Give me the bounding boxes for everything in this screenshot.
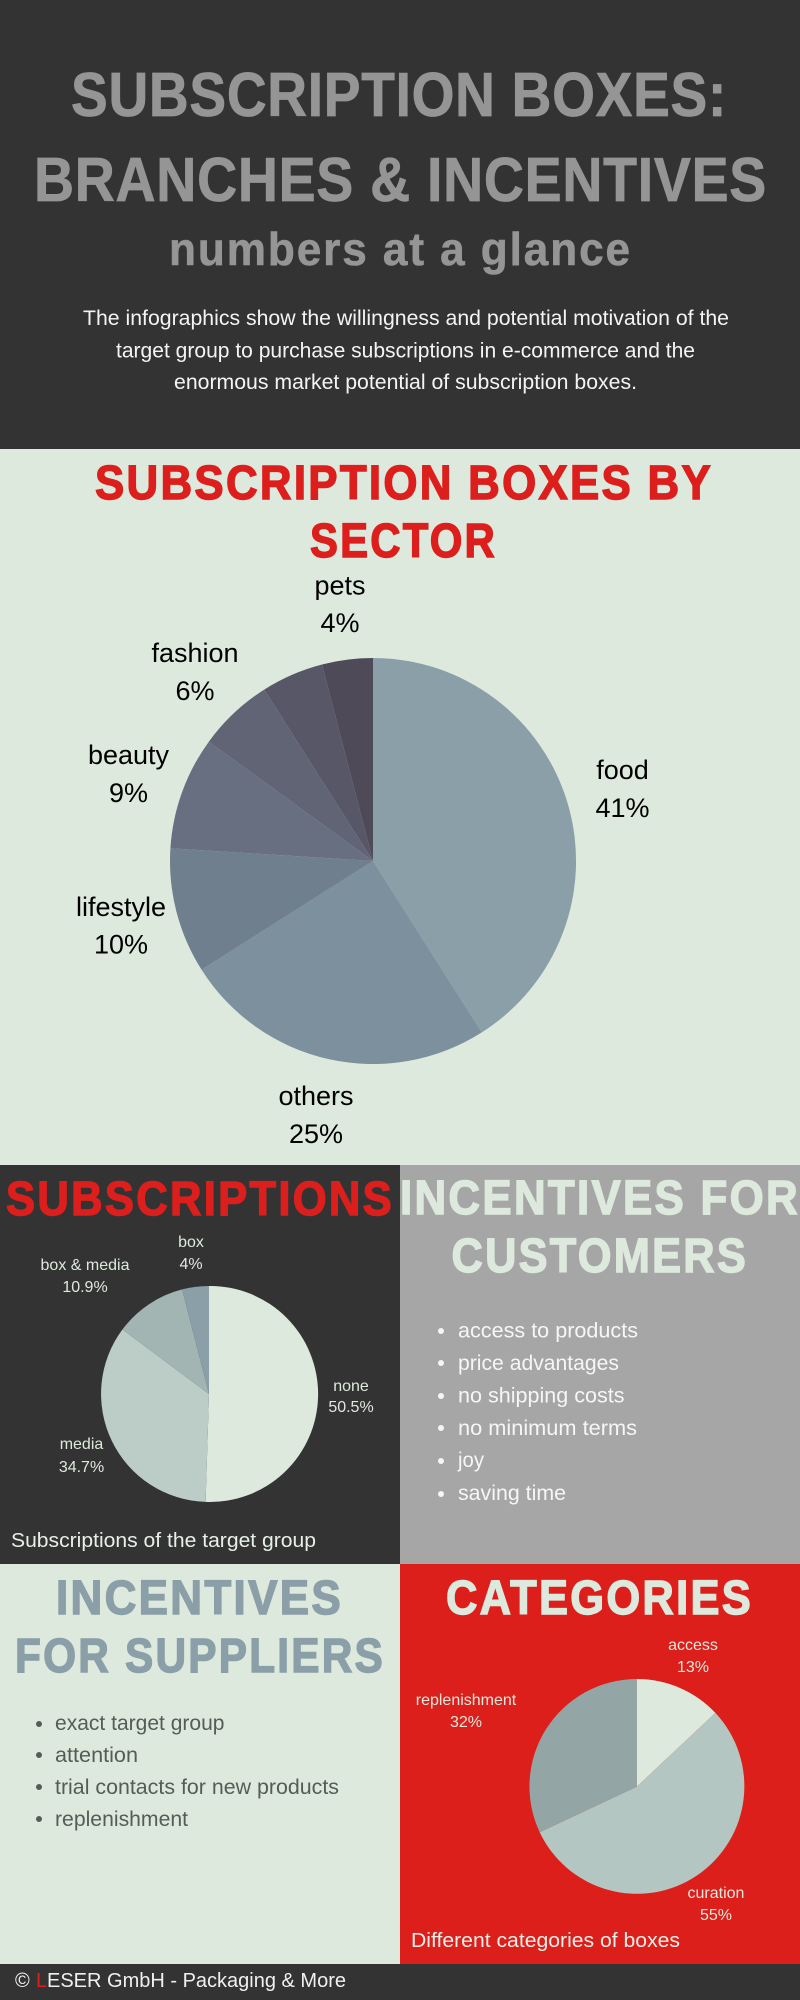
list: customer incentives (438, 1320, 638, 1505)
heading: incentives for suppliers: INCENTIVES (56, 1572, 343, 1625)
panel: categories (400, 1564, 800, 1964)
pie labels: subscriptions: none (333, 1378, 369, 1395)
pie labels: sectors: 10% (94, 930, 148, 960)
pie chart: subscriptions (101, 1286, 318, 1502)
pie labels: sectors: food (596, 755, 649, 785)
heading: incentives for suppliers (15, 1572, 385, 1683)
panel: subscriptions (0, 1165, 400, 1564)
footer: ESER GmbH - Packaging & More (47, 1970, 346, 1992)
list: customer incentives: price advantages (458, 1352, 619, 1375)
pie labels: sectors: beauty (88, 740, 170, 770)
heading: subscriptions: SUBSCRIPTIONS (6, 1173, 394, 1226)
pie labels: sectors: 6% (175, 676, 215, 706)
pie labels: subscriptions (41, 1234, 374, 1476)
list: customer incentives: no shipping costs (458, 1384, 624, 1408)
caption: categories: Different categories of boxes (411, 1930, 680, 1952)
pie labels: subscriptions: box & media (41, 1257, 130, 1274)
footer (0, 1964, 800, 2000)
pie labels: categories: replenishment (416, 1692, 517, 1709)
list: customer incentives: access to products (458, 1320, 638, 1342)
heading: categories: CATEGORIES (446, 1572, 753, 1625)
intro text block (83, 307, 729, 394)
heading: incentives for customers (400, 1172, 800, 1283)
pie labels: categories: curation (688, 1885, 744, 1902)
pie labels: sectors: 4% (320, 608, 360, 638)
list: supplier incentives: exact target group (55, 1712, 224, 1735)
pie labels: sectors: pets (314, 570, 366, 600)
caption: subscriptions: Subscriptions of the target group (11, 1530, 316, 1552)
pie chart: categories (529, 1679, 744, 1894)
list: customer incentives: no minimum terms (458, 1417, 637, 1440)
pie labels: subscriptions: media (60, 1436, 103, 1453)
pie labels: categories: 32% (450, 1714, 482, 1731)
heading: subscription boxes by sector: SECTOR (310, 515, 497, 568)
panel: header (0, 0, 800, 449)
heading: incentives for customers: CUSTOMERS (452, 1230, 748, 1283)
pie labels: categories: 13% (677, 1659, 709, 1676)
panel: incentives for suppliers (0, 1564, 400, 1964)
heading: subscription boxes by sector (95, 457, 713, 568)
pie labels: sectors: 41% (595, 793, 650, 823)
pie labels: subscriptions: 50.5% (328, 1399, 374, 1416)
pie chart: sectors (170, 658, 576, 1064)
pie labels: categories: 55% (700, 1907, 732, 1924)
intro text block: enormous market potential of subscription boxes. (174, 371, 637, 394)
pie labels: sectors: others (278, 1081, 354, 1111)
title: SUBSCRIPTION BOXES: (71, 61, 727, 130)
pie labels: subscriptions: 34.7% (59, 1459, 104, 1476)
list: customer incentives: joy (457, 1449, 484, 1472)
subtitle: numbers at a glance (169, 223, 632, 275)
pie labels: sectors: fashion (151, 638, 239, 668)
title (34, 61, 767, 215)
heading: incentives for suppliers: FOR SUPPLIERS (15, 1630, 385, 1683)
pie labels: categories: access (668, 1637, 718, 1654)
pie labels: subscriptions: 10.9% (62, 1279, 108, 1296)
list: customer incentives: saving time (458, 1482, 566, 1505)
pie labels: sectors: 25% (289, 1119, 343, 1149)
pie labels: sectors: 9% (109, 778, 148, 808)
list: supplier incentives: attention (55, 1744, 138, 1767)
heading: subscription boxes by sector: SUBSCRIPTION BOXES BY (95, 457, 713, 510)
panel: incentives for customers (400, 1165, 800, 1564)
pie labels: subscriptions: box (178, 1234, 204, 1251)
list: supplier incentives (36, 1712, 339, 1831)
pie labels: categories (416, 1637, 744, 1924)
intro text block: The infographics show the willingness and potential motivation of the (83, 307, 729, 330)
pie labels: sectors: lifestyle (76, 892, 166, 922)
panel: subscription boxes by sector (0, 449, 800, 1165)
pie labels: subscriptions: 4% (179, 1256, 203, 1273)
footer: © (15, 1970, 30, 1992)
list: supplier incentives: replenishment (55, 1808, 188, 1831)
list: supplier incentives: trial contacts for new products (55, 1776, 339, 1799)
pie labels: sectors (76, 570, 650, 1149)
footer: L (36, 1970, 47, 1992)
intro text block: target group to purchase subscriptions in e-commerce and the (116, 340, 695, 362)
